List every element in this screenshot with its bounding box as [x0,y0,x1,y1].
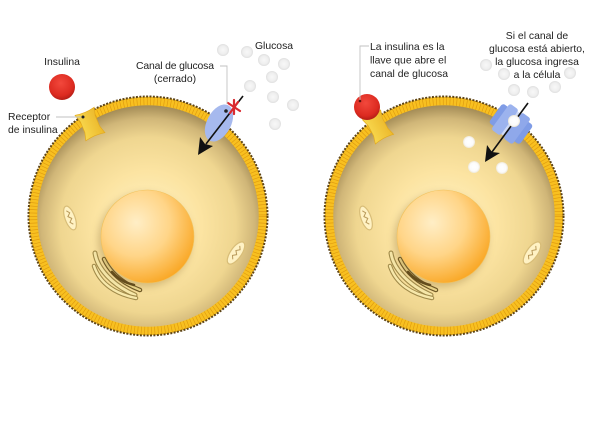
insulin receptor bound [362,110,394,144]
label: si el canal de glucosa esta abierto: a la célula [514,70,561,81]
insulin free [49,74,75,100]
label: la insulina es la llave: canal de glucosa [370,69,448,80]
cytoplasm [36,104,260,328]
cytoplasm [332,104,556,328]
glucose molecules left [217,44,299,130]
golgi apparatus [390,253,436,298]
glucose channel closed [199,100,239,146]
label: receptor de insulina: Receptor [8,112,50,123]
glucose channel open [486,100,536,148]
leader lines [56,46,369,117]
mitochondrion right [224,239,248,267]
nucleus shadow [394,193,488,287]
nucleus shadow [98,193,192,287]
receptor dot [82,116,84,118]
label: receptor de insulina: de insulina [8,125,58,136]
mitochondrion right [520,239,544,267]
membrane [28,96,268,336]
insulin receptor [75,107,105,141]
label: cerrado: (cerrado) [154,74,196,85]
arrow through channel [198,96,243,155]
nucleus [101,190,194,283]
nucleus [397,190,490,283]
label: glucosa: Glucosa [255,41,293,52]
label: insulina: Insulina [44,57,80,68]
mitochondrion left [61,205,79,231]
label: si el canal de glucosa esta abierto: la glucosa ingresa [495,57,579,68]
insulin dot [359,100,361,102]
label: si el canal de glucosa esta abierto: Si el canal de [506,31,568,42]
label: la insulina es la llave: La insulina es la [370,42,445,53]
label: la insulina es la llave: llave que abre el [370,56,446,66]
insulin bound to receptor [354,94,380,120]
left cell [28,96,268,336]
golgi apparatus [94,253,140,298]
label: si el canal de glucosa esta abierto: glucosa está abierto, [489,44,585,55]
glucose inside cell [463,136,508,174]
red x mark [228,100,240,114]
mitochondrion left [357,205,375,231]
right cell [324,94,564,336]
label: canal de glucosa: Canal de glucosa [136,61,214,72]
glucose molecules right [480,59,576,98]
arrow through open channel [485,103,528,162]
glucose in channel [508,115,520,127]
membrane [324,96,564,336]
